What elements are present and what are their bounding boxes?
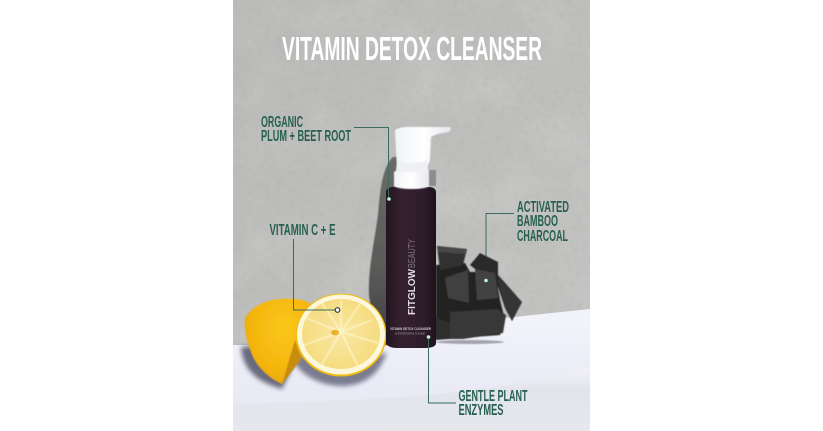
product subtext: ACTIVATED DETOX CLEANSE: [395, 332, 425, 336]
label: activated bamboo charcoal: [517, 201, 569, 241]
leader line: gentle plant enzymes: [427, 335, 456, 403]
title: VITAMIN DETOX CLEANSER: [282, 30, 542, 67]
bottle: [386, 187, 436, 348]
brand text: FITGLOW: FITGLOW: [407, 268, 418, 315]
lemon shadows on ledge: [241, 345, 387, 389]
lemon back half: [245, 299, 310, 384]
leader line: vitamin c + e: [294, 239, 340, 312]
brand text: BEAUTY: BEAUTY: [407, 239, 418, 268]
label: gentle plant enzymes: ENZYMES: [458, 402, 504, 419]
charcoal: [435, 246, 522, 344]
panel: photo background: [233, 0, 590, 431]
leader line: organic plum and beet root: [354, 128, 391, 201]
product name: VITAMIN DETOX CLEANSER: [390, 327, 431, 331]
label: organic plum and beet root: PLUM + BEET ROOT: [261, 128, 351, 145]
lemon cut face: [296, 294, 386, 376]
infographic: [233, 0, 590, 431]
label: gentle plant enzymes: [458, 390, 528, 415]
label: organic plum and beet root: ORGANIC: [261, 114, 303, 131]
label: activated bamboo charcoal: CHARCOAL: [517, 228, 568, 245]
leader line: activated bamboo charcoal: [484, 214, 514, 282]
label: organic plum and beet root: [261, 116, 351, 141]
bottle shadow on wall: [369, 157, 436, 345]
pump: [394, 127, 451, 189]
label: gentle plant enzymes: GENTLE PLANT: [458, 388, 528, 405]
label: activated bamboo charcoal: BAMBOO: [517, 213, 558, 230]
label: activated bamboo charcoal: ACTIVATED: [517, 199, 569, 216]
label: vitamin c + e: VITAMIN C + E: [270, 222, 336, 239]
